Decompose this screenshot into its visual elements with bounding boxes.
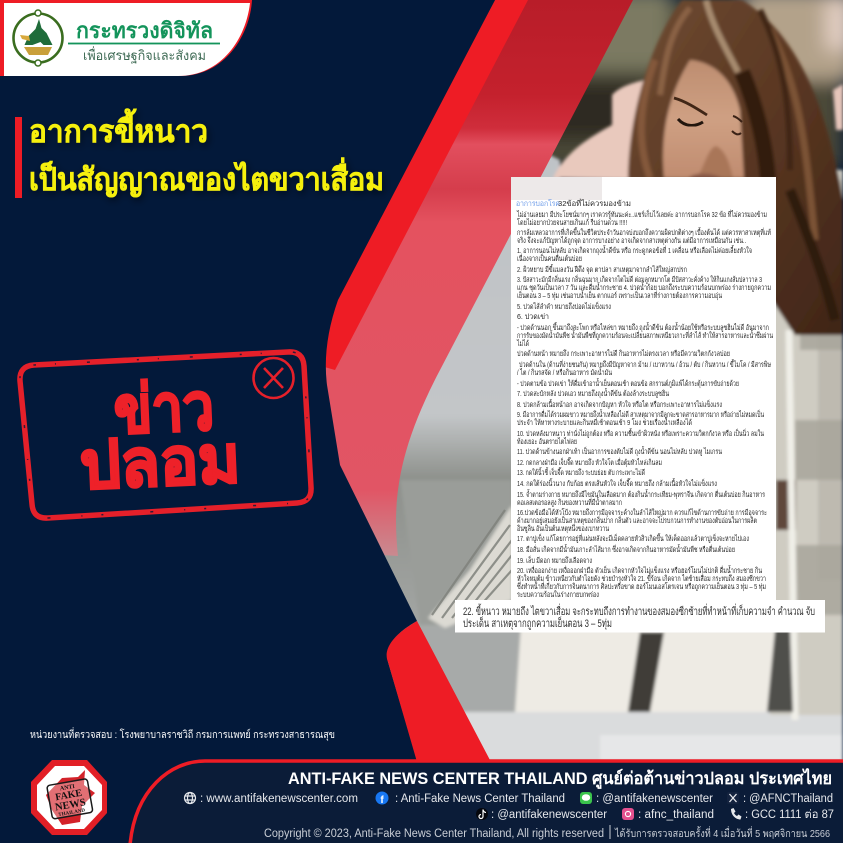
screenshot card: symptom list: อินซูลิน อันเป็นต้นเหตุหนึ่งของเบาหวาน (517, 523, 609, 533)
logo name: กระทรวงดิจิทัล (76, 18, 213, 43)
screenshot card: symptom list: ปวดด้านหน้า หมายถึง กระเพาะอาหารไม่ดี กินอาหารไม่ตรงเวลา หรือมีความวิตกกังวลบ่อย (517, 349, 730, 358)
screenshot card: symptom list: 1. อาการนอนไม่หลับ อาจเกิดจากถุงน้ำดีข้น หรือ กระดูกคอข้อที่ 1 เคลื่อน หรือเลือดไม่ค่อยเลี้ยงหัวใจ (517, 245, 752, 255)
screenshot card: symptom list: - ปวดตามข้อ ปวดเข่า ให้ดื่มเข้าอาน้ำเย็นตอนเช้า ตอนข้อ สกรานต์ภูมิแพ้ได้กระตุ้นการขับถ่ายด้วย (517, 378, 739, 388)
screenshot card: symptom list: 6. ปวดเข่า (517, 312, 549, 321)
screenshot card: symptom list: 2. ผิวหยาบ มีขี้แมลงวัน ฝีดึง จุด ตาปลา สาเหตุมาจากลำไส้ใหญ่สกปรก (517, 264, 687, 274)
screenshot card: symptom list: ประจำ ให้หาทางระบายและกินหมี่เช้าตอนเช้า 9 โมง ช่วยเรื่องน้ำเหลืองได้ (517, 417, 692, 427)
footer contacts row 1: : @antifakenewscenter (596, 793, 713, 805)
footer contacts row 1: : www.antifakenewscenter.com (200, 793, 358, 805)
icon: facebook (376, 792, 388, 806)
icon: facebook: f (380, 795, 384, 806)
screenshot card: symptom list: 18. มือสั่น เกิดจากมีน้ำมันเกาะลำไส้มาก ซึ่งอาจเกิดจากกินอาหารมัดน้ำมันพืช หรือตื่นเต้นบ่อย (517, 544, 735, 554)
icon: globe (184, 792, 196, 804)
footer contacts row 2 (476, 808, 834, 821)
bright red diagonal stripe (300, 0, 528, 370)
icon: x (727, 792, 739, 804)
stamp word 2: ปลอม (79, 422, 242, 502)
screenshot card: symptom list: ท้องเยอะ อันตรายไตไฟลย (517, 437, 577, 446)
fake news stamp (20, 352, 311, 518)
logo panel: ministry of digital (0, 0, 252, 76)
screenshot card: symptom list: 11. ปวดด้านข้างนอกฝ่าเท้า เป็นอาการของตับไม่ดี ถุงน้ำดีข้น นอนไม่หลับ ปวดหู ไมเกรน (517, 446, 722, 456)
screenshot card: symptom list: 5. ปวดไส้ลำคำ หมายถึงปอดไม่แข็งแรง (517, 301, 611, 311)
footer logo: anti-fake news center: NEWS (54, 797, 87, 813)
footer copyright: Copyright © 2023, Anti-Fake News Center Thailand, All rights reserved (264, 828, 604, 840)
icon: line (580, 792, 592, 804)
screenshot card: symptom list: เย็นตอน 3 – 5 ทุ่ม เช่นอาบน้ำเย็น ตากแอร์ เพราะเป็นเวลาที่ร่างกายต้องการความอบอุ่น (517, 290, 722, 300)
screenshot card: symptom list: โดยไม่อยากป่วยจนสายเกินแก้ รีบอ่านด่วน !!!!! (517, 218, 627, 227)
screenshot card: symptom list: 20. เหงื่อออกง่าย เหงื่อออกฝ่ามือ ตัวเย็น เกิดจากหัวใจไม่แข็งแรง หรือฮอร์โมนไม่ปกติ ดื่มน้ำกระชาย กิน (517, 565, 762, 575)
screenshot card: symptom list: คอเลสเตอรอลสูง กินของหวานที่มีน้ำตาลมาก (517, 497, 622, 507)
logo tagline: เพื่อเศรษฐกิจและสังคม (83, 46, 206, 64)
translucent red diagonal overlay (300, 0, 633, 556)
screenshot card: symptom list: 14. กดใต้ร่องนิ้วนาง กับก้อย ตรงเส้นหัวใจ เจ็บจี๊ด หมายถึง กล้ามเนื้อหัวใจไม่แข็งแรง (517, 478, 717, 488)
icon: ministry emblem (14, 10, 62, 66)
source agency note: หน่วยงานที่ตรวจสอบ : โรงพยาบาลราชวิถี กรมการแพทย์ กระทรวงสาธารณสุข (30, 727, 335, 741)
navy diagonal shape (0, 0, 495, 760)
pillow with striped pattern (432, 510, 512, 618)
screenshot card: symptom list: 13. กดใต้นิ้วชี้ เจ็บจี๊ด หมายถึง ระบบย่อย ตับ กระเพาะไม่ดี (517, 467, 645, 477)
screenshot card: symptom list: 12. กดกลางฝ่ามือ เจ็บจี๊ด หมายถึง หัวใจโต เมื่อตุ้มหัวไหล่เกินลม (517, 457, 662, 467)
footer contacts row 2: : @antifakenewscenter (491, 809, 607, 821)
screenshot card: symptom list: ไม่ได้ (516, 339, 529, 348)
screenshot card: symptom list: อาการบอกโรค (516, 199, 560, 208)
screenshot card: symptom list: 17. ตาปูเข็ง แก้โดยการอยู่ที่แผ่นหลังจะมีเม็ดคลายหัวสิวเกิดขึ้น ให้เค็ดออกแล้วตาปูเข็งจะหายไปเอง (517, 533, 749, 543)
stamp word 1: ข่าว (112, 369, 215, 447)
footer logo: anti-fake news center: FAKE (54, 788, 83, 803)
screenshot card: symptom list: เนื่องจากเป็นคนตื่นเต้นบ่อย (517, 253, 582, 263)
footer heading: ANTI-FAKE NEWS CENTER THAILAND ศูนย์ต่อต้านข่าวปลอม ประเทศไทย (288, 768, 832, 790)
screenshot card: symptom list: 19. เล็บ มีดอก หมายถึงเลือดจาง (517, 555, 592, 565)
screenshot card: symptom list: ค้างมากอยู่เสมอยังเป็นสาเหตุของกลิ่นปาก กลิ่นตัว และอาจจะไปรบกวนการทำงานของตับอ่อนในการผลิต (517, 515, 757, 525)
screenshot card: symptom list: จริง จึงจะแก้ปัญหาได้ถูกจุด อาการบางอย่าง อาจเกิดจากสาเหตุต่างกัน แต่มีอาการเหมือนกัน เช่น.. (517, 236, 746, 245)
footer contacts row 2: : GCC 1111 ต่อ 87 (745, 809, 834, 821)
footer logo: anti-fake news center: ANTI (60, 784, 76, 792)
icon: tiktok (476, 808, 488, 820)
title line 1: อาการขี้หนาว (29, 108, 208, 149)
highlighted caption: symptom 22 (455, 600, 825, 632)
title line 2: เป็นสัญญาณของไตขวาเสื่อม (29, 157, 384, 198)
footer contacts row 1: : @AFNCThailand (743, 793, 833, 805)
screenshot card: symptom list: 7. ปวดสะบักหลัง ปวดเอว หมายถึงถุงน้ำดีข้น ต้องล้างระบบลูซฮิน (517, 388, 669, 398)
footer logo: anti-fake news center: THAILAND (58, 808, 86, 818)
icon: instagram (622, 808, 634, 820)
lower red wedge (387, 621, 491, 762)
screenshot card: symptom list: / ไต / กินรสจัด / หรือกินอาหาร มัดน้ำมัน (517, 367, 612, 377)
icon: phone (731, 808, 742, 820)
footer contacts row 1: : Anti-Fake News Center Thailand (395, 793, 565, 805)
footer logo: anti-fake news center (31, 760, 107, 835)
screenshot card: symptom list: ระบบความร้อนในร่างกายบกพร่อง (517, 590, 599, 599)
footer band (130, 761, 843, 843)
photo: woman wrapped in blanket (380, 0, 843, 762)
screenshot card: symptom list: 8. ปวดกล้ามเนื้อหน้าอก อาจเกิดจากปัญหา หัวใจ หรือไต หรือกระเพาะอาหารไม่แข็งแรง (517, 399, 722, 409)
screenshot card: symptom list (511, 177, 776, 602)
footer contacts row 2: : afnc_thailand (638, 809, 714, 821)
screenshot card: symptom list: 32ข้อที่ไม่ควรมองข้าม (558, 198, 631, 208)
highlighted caption: symptom 22: ประเด็น สาเหตุจากถูกความเย็นตอน 3 – 5ทุ่ม (463, 616, 612, 630)
icon: x in circle (254, 358, 294, 398)
title block (15, 108, 208, 198)
footer contacts row 1 (184, 792, 833, 806)
